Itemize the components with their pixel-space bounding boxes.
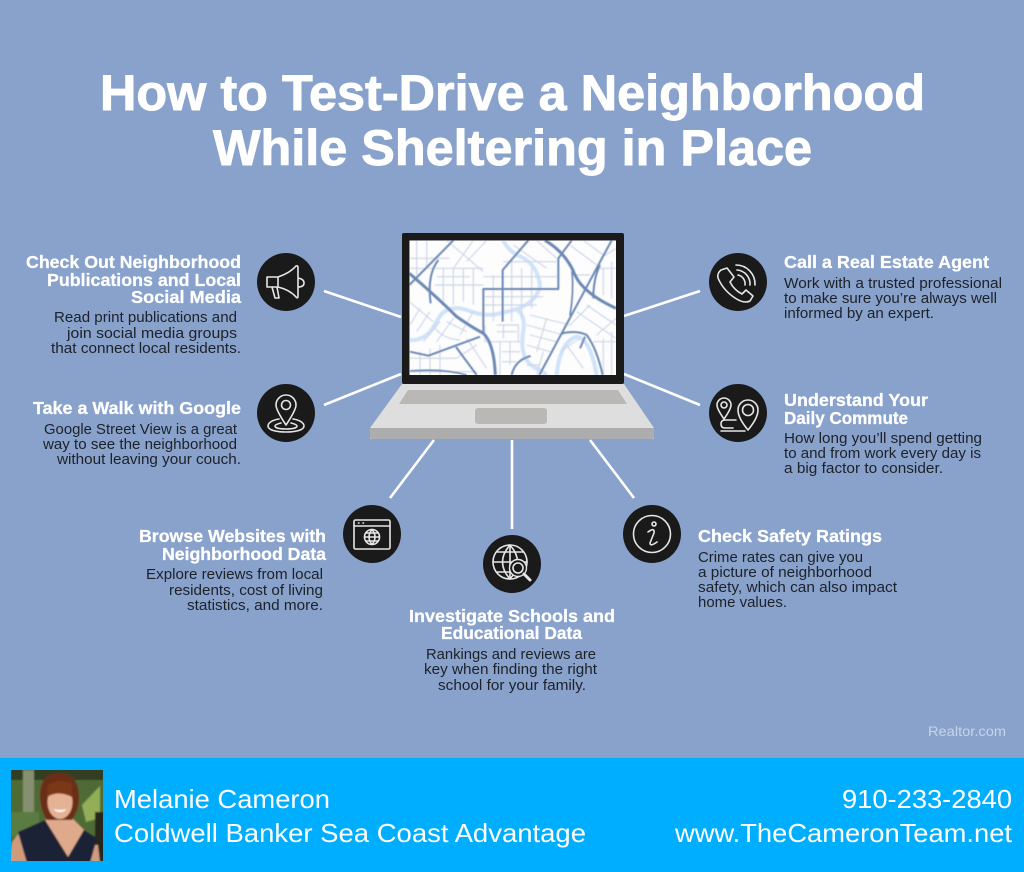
title bbox=[100, 65, 925, 176]
item: real estate agent: to make sure you’re always well bbox=[784, 291, 997, 307]
item: schools data: school for your family. bbox=[438, 678, 586, 694]
minor streets bbox=[409, 240, 616, 375]
item: neighborhood websites: Explore reviews from local bbox=[146, 567, 323, 583]
item: neighborhood publications: Social Media bbox=[131, 287, 241, 307]
item: neighborhood websites: Neighborhood Data bbox=[162, 544, 326, 564]
item: real estate agent: Work with a trusted professional bbox=[784, 276, 1002, 292]
item: safety ratings: a picture of neighborhood bbox=[698, 565, 872, 581]
item: daily commute: to and from work every day is bbox=[784, 446, 981, 462]
agent name and brokerage: Coldwell Banker Sea Coast Advantage bbox=[114, 818, 586, 848]
contact details: www.TheCameronTeam.net bbox=[674, 818, 1013, 848]
item: neighborhood websites: Browse Websites with bbox=[139, 526, 326, 546]
item: safety ratings: Check Safety Ratings bbox=[698, 526, 882, 546]
item: daily commute: Understand Your bbox=[784, 390, 928, 410]
item: Google walk: Take a Walk with Google bbox=[33, 398, 241, 418]
icon: route pins bbox=[709, 384, 767, 442]
main roads bbox=[409, 240, 616, 375]
item: Google walk bbox=[33, 398, 241, 468]
title: While Sheltering in Place bbox=[213, 120, 812, 176]
agent name and brokerage: Melanie Cameron bbox=[114, 784, 330, 814]
item: schools data: Educational Data bbox=[441, 623, 582, 643]
item: schools data: Rankings and reviews are bbox=[426, 647, 596, 663]
item: Google walk: without leaving your couch. bbox=[56, 452, 241, 468]
item: neighborhood publications bbox=[26, 252, 241, 357]
item: safety ratings bbox=[698, 526, 897, 611]
contact details: 910-233-2840 bbox=[842, 784, 1012, 814]
item: daily commute bbox=[784, 390, 982, 477]
river bbox=[409, 240, 597, 375]
item: schools data bbox=[409, 606, 615, 694]
icon: globe with magnifier bbox=[483, 535, 541, 593]
footer band bbox=[0, 758, 1024, 872]
connector lines bbox=[324, 291, 700, 529]
item: Google walk: way to see the neighborhood bbox=[42, 437, 237, 453]
source credit: Realtor.com bbox=[928, 724, 1006, 739]
item: Google walk: Google Street View is a great bbox=[44, 422, 237, 438]
item: safety ratings: Crime rates can give you bbox=[698, 550, 863, 566]
icon: megaphone bbox=[257, 253, 315, 311]
contact details bbox=[674, 784, 1013, 848]
item: daily commute: a big factor to consider. bbox=[784, 461, 943, 477]
laptop illustration with map bbox=[370, 233, 654, 439]
laptop screen bbox=[402, 233, 624, 384]
item: safety ratings: safety, which can also impact bbox=[698, 580, 897, 596]
item: neighborhood publications: join social media groups bbox=[66, 326, 237, 342]
icon: telephone bbox=[709, 253, 767, 311]
item: safety ratings: home values. bbox=[698, 595, 787, 611]
item: neighborhood publications: Publications and Local bbox=[47, 270, 241, 290]
item: neighborhood websites: residents, cost of living bbox=[169, 583, 323, 599]
item: real estate agent: Call a Real Estate Agent bbox=[784, 252, 989, 272]
icon: map pin bbox=[257, 384, 315, 442]
agent name and brokerage bbox=[114, 784, 586, 848]
street map bbox=[409, 240, 616, 375]
item: daily commute: How long you’ll spend getting bbox=[784, 431, 982, 447]
item: neighborhood publications: Read print publications and bbox=[54, 310, 237, 326]
item: neighborhood publications: that connect local residents. bbox=[51, 341, 241, 357]
title: How to Test-Drive a Neighborhood bbox=[100, 65, 925, 121]
icon: browser window bbox=[343, 505, 401, 563]
item: neighborhood websites bbox=[139, 526, 326, 614]
item: real estate agent bbox=[784, 252, 1002, 322]
item: neighborhood publications: Check Out Neighborhood bbox=[26, 252, 241, 272]
laptop base bbox=[370, 384, 654, 439]
icon: information bbox=[623, 505, 681, 563]
item: neighborhood websites: statistics, and more. bbox=[187, 598, 323, 614]
item: schools data: key when finding the right bbox=[424, 662, 597, 678]
item: real estate agent: informed by an expert. bbox=[784, 306, 934, 322]
item: schools data: Investigate Schools and bbox=[409, 606, 615, 626]
agent photo bbox=[9, 768, 105, 863]
item: daily commute: Daily Commute bbox=[784, 408, 908, 428]
